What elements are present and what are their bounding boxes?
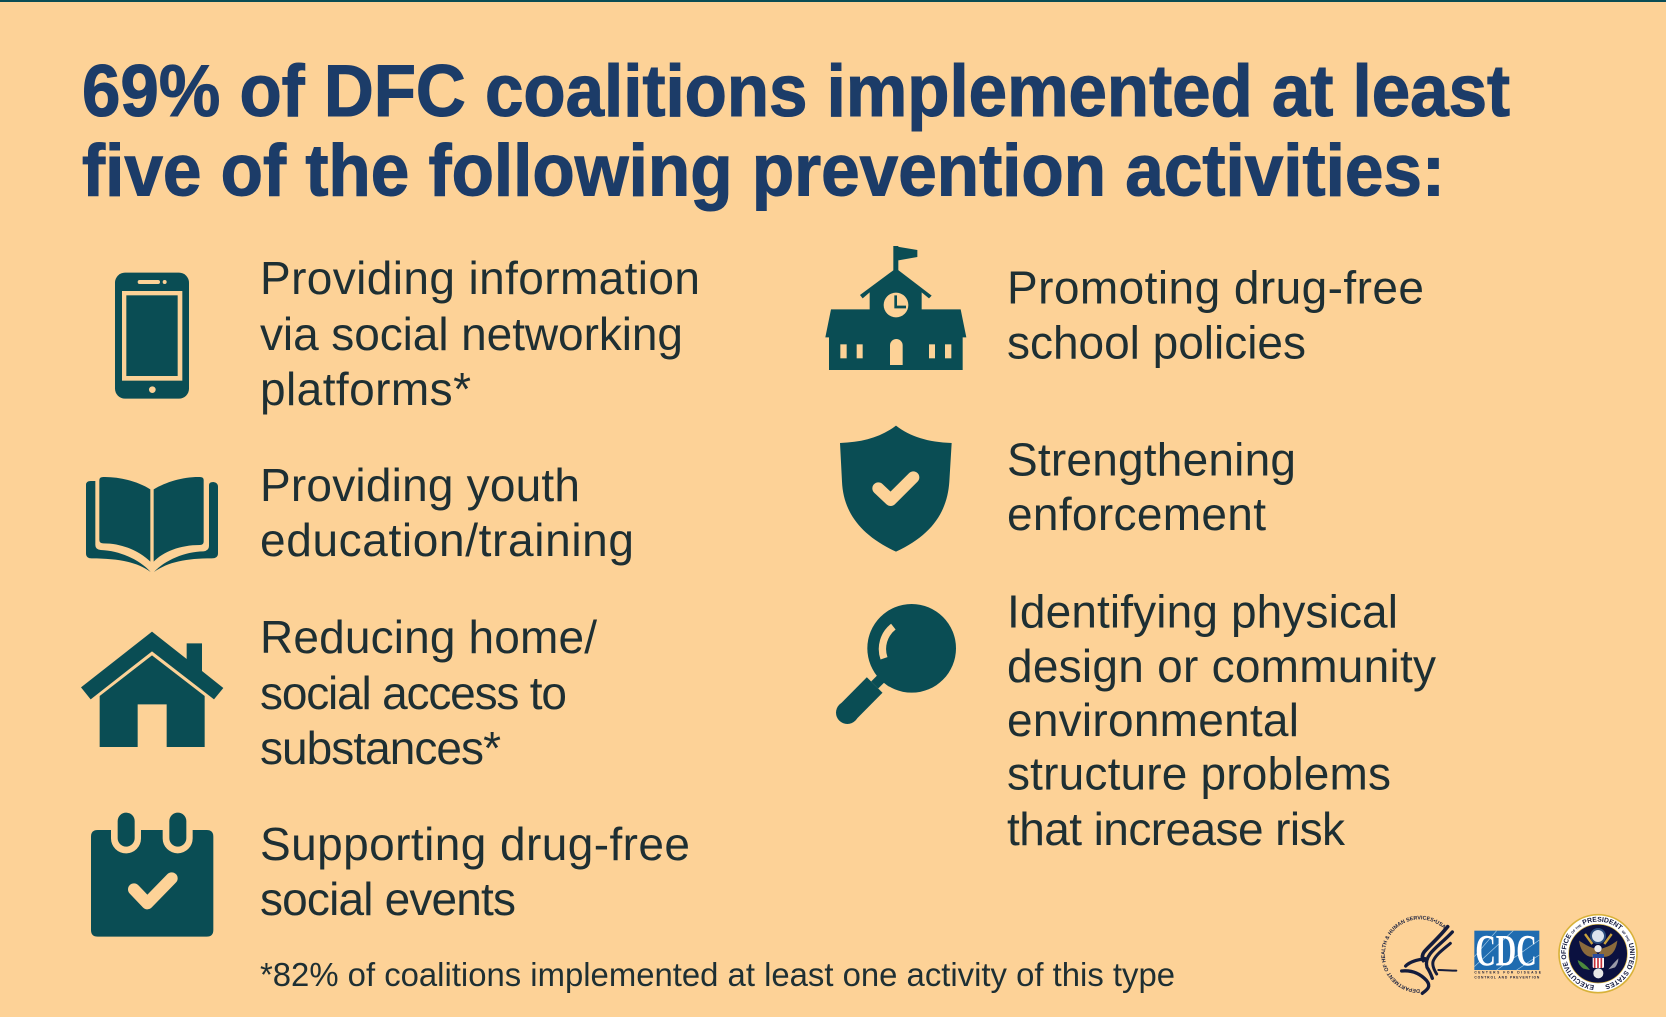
logo: CDC (1474, 926, 1542, 980)
text: school policies: school policies (1007, 316, 1306, 368)
icon: smartphone (115, 273, 189, 399)
title: 69% of DFC coalitions implemented at least (82, 51, 1510, 132)
text: school policies (1007, 262, 1424, 368)
text: social events: social events (260, 873, 516, 925)
text: physical design: Identifying physical (1007, 586, 1398, 638)
logo: CDC: CDC (1475, 926, 1537, 975)
logo: CDC: CENTERS FOR DISEASE (1474, 971, 1542, 975)
text: physical design (1007, 586, 1436, 855)
logo: CDC: CONTROL AND PREVENTION (1474, 976, 1540, 980)
icon: calendar with check (91, 813, 213, 937)
title: five of the following prevention activities: (82, 130, 1445, 212)
text: home access: substances* (260, 722, 501, 774)
icon: house (81, 632, 223, 747)
logo: Executive Office seal: EXECUTIVE OFFICE OF THE PRESIDENT OF THE UNITED STATES (1561, 916, 1635, 990)
icon: school (825, 246, 966, 370)
text: social networking: platforms* (260, 363, 471, 415)
text: social networking: Providing information (260, 252, 700, 304)
icon: open book (86, 477, 218, 572)
text: home access (260, 611, 597, 774)
text: youth education (260, 459, 634, 566)
text: youth education: Providing youth (260, 459, 580, 511)
icon: magnifying glass (836, 604, 956, 724)
text: enforcement: Strengthening (1007, 434, 1296, 486)
text: physical design: environmental (1007, 694, 1299, 746)
text: physical design: that increase risk (1007, 803, 1346, 855)
text: social networking (260, 252, 700, 415)
text: physical design: design or community (1007, 640, 1436, 692)
text: physical design: structure problems (1007, 748, 1391, 800)
logo: HHS: DEPARTMENT OF HEALTH & HUMAN SERVICES•USA (1381, 916, 1446, 993)
icon: shield with check (840, 426, 952, 552)
text: social networking: via social networking (260, 308, 683, 360)
title (82, 51, 1510, 212)
footnote: *82% of coalitions implemented at least one activity of this type (260, 956, 1175, 993)
text: home access: Reducing home/ (260, 611, 597, 663)
text: school policies: Promoting drug-free (1007, 262, 1424, 314)
text: social events: Supporting drug-free (260, 818, 690, 870)
text: social events (260, 818, 690, 925)
text: youth education: education/training (260, 514, 634, 566)
text: home access: social access to (260, 667, 567, 719)
text: enforcement: enforcement (1007, 488, 1266, 540)
text: enforcement (1007, 434, 1296, 540)
